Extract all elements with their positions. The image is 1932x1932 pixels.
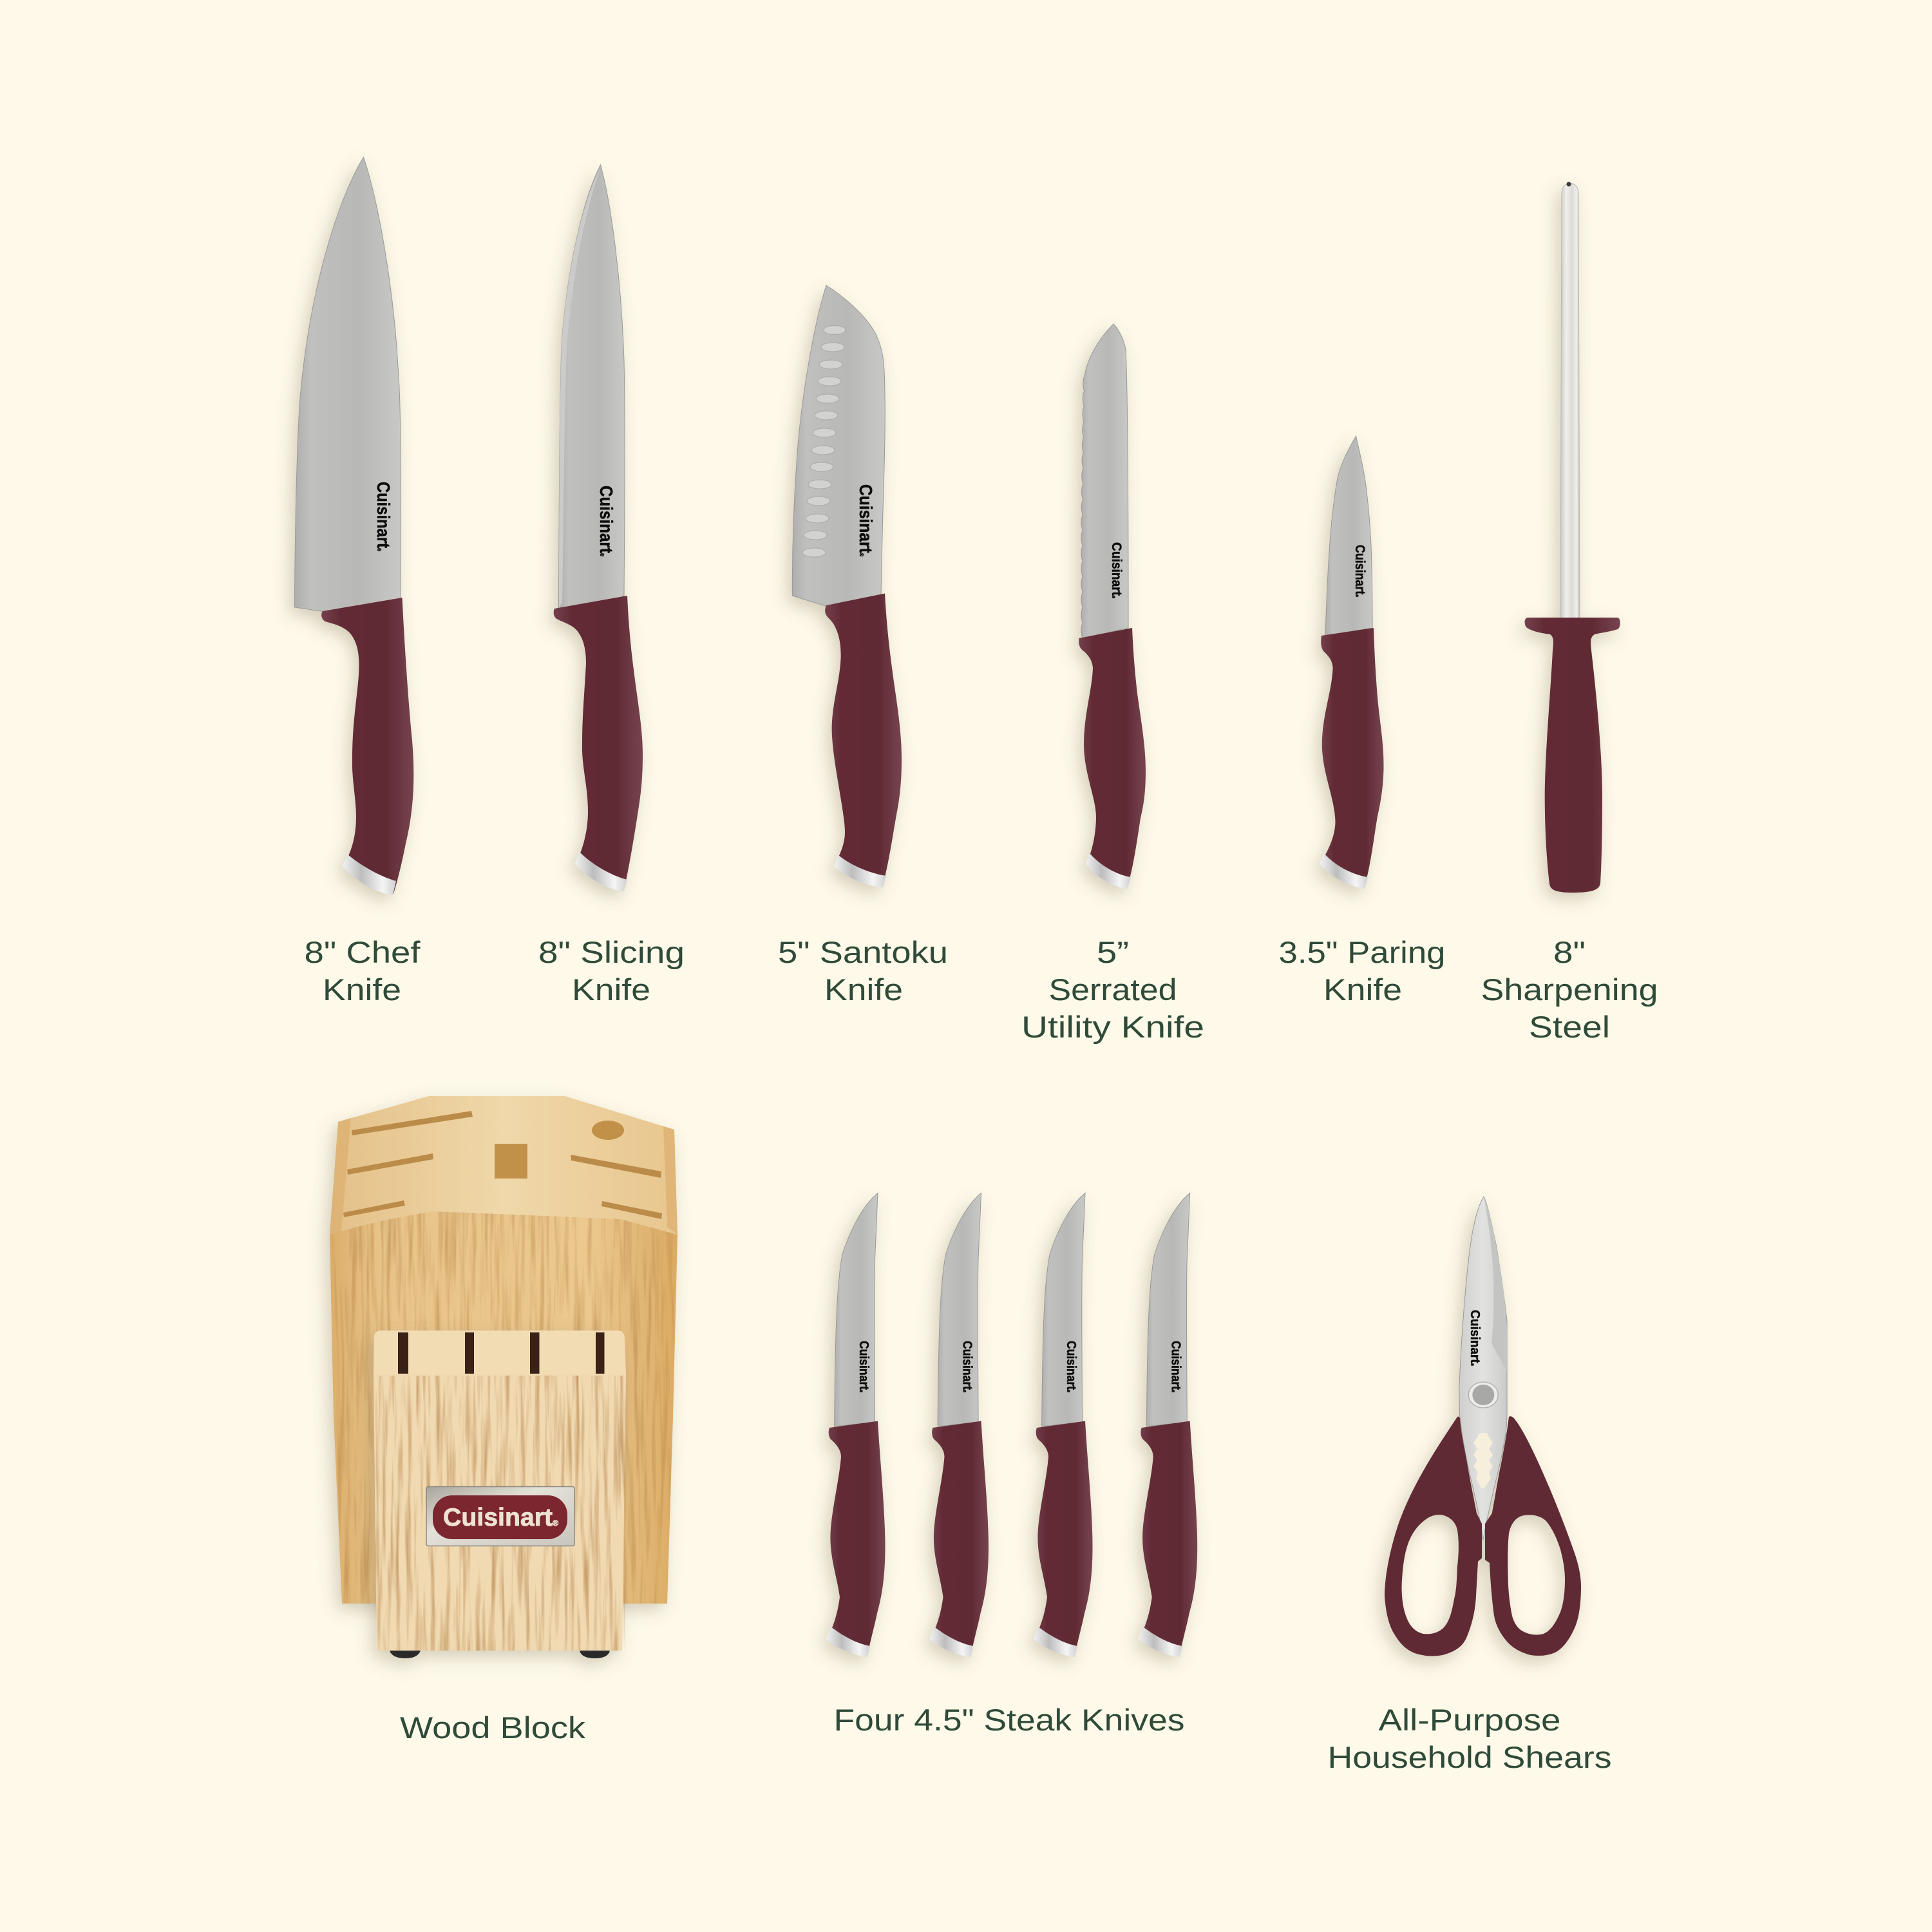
chef ferrule bbox=[343, 854, 396, 895]
santoku logo: Cuisinart® bbox=[856, 484, 876, 556]
front block front face bbox=[374, 1374, 626, 1651]
knife: 5 inch santoku knife bbox=[792, 285, 902, 887]
label: 8" Sharpening Steel: 8" bbox=[1553, 935, 1586, 969]
shears right handle bbox=[1485, 1416, 1581, 1656]
household shears bbox=[1385, 1197, 1581, 1656]
paring logo: Cuisinart® bbox=[1352, 545, 1367, 597]
steak knife 2 bbox=[930, 1193, 989, 1657]
steak handle 1 bbox=[827, 1421, 885, 1656]
steak knife 1 bbox=[826, 1193, 885, 1657]
paring blade bbox=[1325, 436, 1372, 636]
label: 8" Slicing Knife: 8" Slicing bbox=[538, 935, 685, 969]
chef logo: Cuisinart® bbox=[374, 482, 393, 551]
label: 8" Chef Knife: 8" Chef bbox=[304, 935, 421, 969]
label: 5” Serrated Utility Knife: 5” bbox=[1097, 935, 1129, 969]
steak knife 3 bbox=[1034, 1193, 1092, 1657]
label: 5” Serrated Utility Knife bbox=[1021, 935, 1204, 1044]
chef handle bbox=[321, 598, 413, 894]
paring handle bbox=[1320, 628, 1383, 886]
shears blade bbox=[1459, 1197, 1507, 1540]
serrated logo: Cuisinart® bbox=[1109, 542, 1124, 599]
slicing ferrule bbox=[575, 852, 627, 891]
back block front face bbox=[330, 1211, 677, 1604]
slicing blade bbox=[559, 165, 625, 609]
top slots bbox=[343, 1111, 662, 1219]
label: All-Purpose Household Shears: Household Shears bbox=[1328, 1740, 1611, 1774]
steak blade 3 bbox=[1042, 1193, 1085, 1426]
label: 8" Slicing Knife: Knife bbox=[572, 972, 650, 1007]
label: 3.5" Paring Knife: Knife bbox=[1323, 972, 1402, 1007]
badge plate bbox=[426, 1486, 574, 1546]
label: All-Purpose Household Shears bbox=[1328, 1703, 1611, 1774]
shears pivot bbox=[1468, 1382, 1498, 1408]
steak logo 2: Cuisinart® bbox=[960, 1341, 974, 1393]
sharpening steel bbox=[1525, 182, 1620, 893]
shears pivot hole bbox=[1472, 1385, 1494, 1405]
steak logo 3: Cuisinart® bbox=[1064, 1341, 1078, 1393]
label: 8" Slicing Knife bbox=[538, 935, 685, 1007]
steak logo 1: Cuisinart® bbox=[857, 1341, 871, 1393]
shears left handle bbox=[1385, 1417, 1482, 1656]
badge logo text: Cuisinart® bbox=[443, 1504, 558, 1531]
front block slits bbox=[398, 1332, 604, 1374]
top face end grain strips bbox=[330, 1118, 677, 1235]
front block bbox=[374, 1331, 626, 1658]
shears logo: Cuisinart® bbox=[1468, 1310, 1482, 1367]
steak logo 4: Cuisinart® bbox=[1169, 1341, 1183, 1393]
steel rod tip bbox=[1566, 182, 1571, 187]
front block grain bbox=[374, 1376, 626, 1651]
steak ferrule 1 bbox=[826, 1627, 870, 1657]
square hole bbox=[495, 1144, 527, 1179]
steak handle 2 bbox=[930, 1421, 989, 1656]
label: 5" Santoku Knife: 5" Santoku bbox=[778, 935, 948, 969]
front block top face bbox=[374, 1331, 626, 1376]
block badge bbox=[426, 1486, 574, 1546]
santoku ferrule bbox=[834, 855, 886, 887]
back block grain bbox=[322, 1211, 683, 1610]
shears blade bevel bbox=[1484, 1197, 1507, 1372]
back block top face bbox=[330, 1096, 677, 1235]
santoku handle bbox=[825, 594, 902, 885]
steak handle 4 bbox=[1139, 1421, 1197, 1656]
label: 5" Santoku Knife: Knife bbox=[824, 972, 903, 1007]
label: 3.5" Paring Knife bbox=[1279, 935, 1445, 1007]
serrated ferrule bbox=[1086, 853, 1131, 889]
label: 8" Sharpening Steel: Steel bbox=[1529, 1010, 1610, 1044]
wood block bbox=[322, 1096, 683, 1658]
slicing handle bbox=[554, 596, 643, 890]
shears cracker gap bbox=[1473, 1433, 1493, 1488]
label: 5” Serrated Utility Knife: Serrated bbox=[1048, 972, 1177, 1007]
round hole bbox=[592, 1121, 624, 1140]
front block feet bbox=[390, 1651, 610, 1658]
slicing blade bevel bbox=[559, 169, 600, 608]
knife: 8 inch chef knife bbox=[294, 157, 413, 895]
steak knife 4 bbox=[1139, 1193, 1197, 1657]
steak handle 3 bbox=[1034, 1421, 1092, 1656]
knife: 8 inch slicing knife bbox=[554, 165, 643, 891]
paring ferrule bbox=[1320, 853, 1368, 889]
steak ferrule 3 bbox=[1034, 1627, 1077, 1657]
steak blade 2 bbox=[938, 1193, 981, 1426]
label: 3.5" Paring Knife: 3.5" Paring bbox=[1279, 935, 1445, 969]
steak ferrule 2 bbox=[930, 1627, 974, 1657]
label: Four 4.5" Steak Knives: Four 4.5" Steak Knives bbox=[833, 1703, 1185, 1737]
label: All-Purpose Household Shears: All-Purpose bbox=[1378, 1703, 1561, 1737]
label: 8" Chef Knife: Knife bbox=[323, 972, 401, 1007]
santoku dimples bbox=[802, 326, 846, 557]
santoku blade bbox=[792, 285, 885, 607]
slicing logo: Cuisinart® bbox=[596, 486, 616, 556]
knife: 3.5 inch paring knife bbox=[1320, 436, 1383, 889]
badge red oval bbox=[433, 1495, 567, 1539]
steel rod bbox=[1560, 183, 1580, 618]
steak blade 4 bbox=[1146, 1193, 1190, 1426]
chef blade bbox=[294, 157, 401, 612]
steak ferrule 4 bbox=[1139, 1627, 1182, 1657]
steak blade 1 bbox=[835, 1193, 878, 1426]
label: 5" Santoku Knife bbox=[778, 935, 948, 1007]
steel guard and handle bbox=[1525, 618, 1620, 893]
label: 8" Sharpening Steel: Sharpening bbox=[1481, 972, 1658, 1007]
back block bbox=[322, 1096, 683, 1610]
serrated blade bbox=[1081, 324, 1128, 638]
serrated handle bbox=[1079, 628, 1146, 887]
label: 5” Serrated Utility Knife: Utility Knife bbox=[1021, 1010, 1204, 1044]
label: 8" Sharpening Steel bbox=[1481, 935, 1658, 1044]
label: 8" Chef Knife bbox=[304, 935, 421, 1007]
label: Wood Block: Wood Block bbox=[400, 1710, 586, 1745]
knife: 5 inch serrated utility knife bbox=[1079, 324, 1146, 889]
